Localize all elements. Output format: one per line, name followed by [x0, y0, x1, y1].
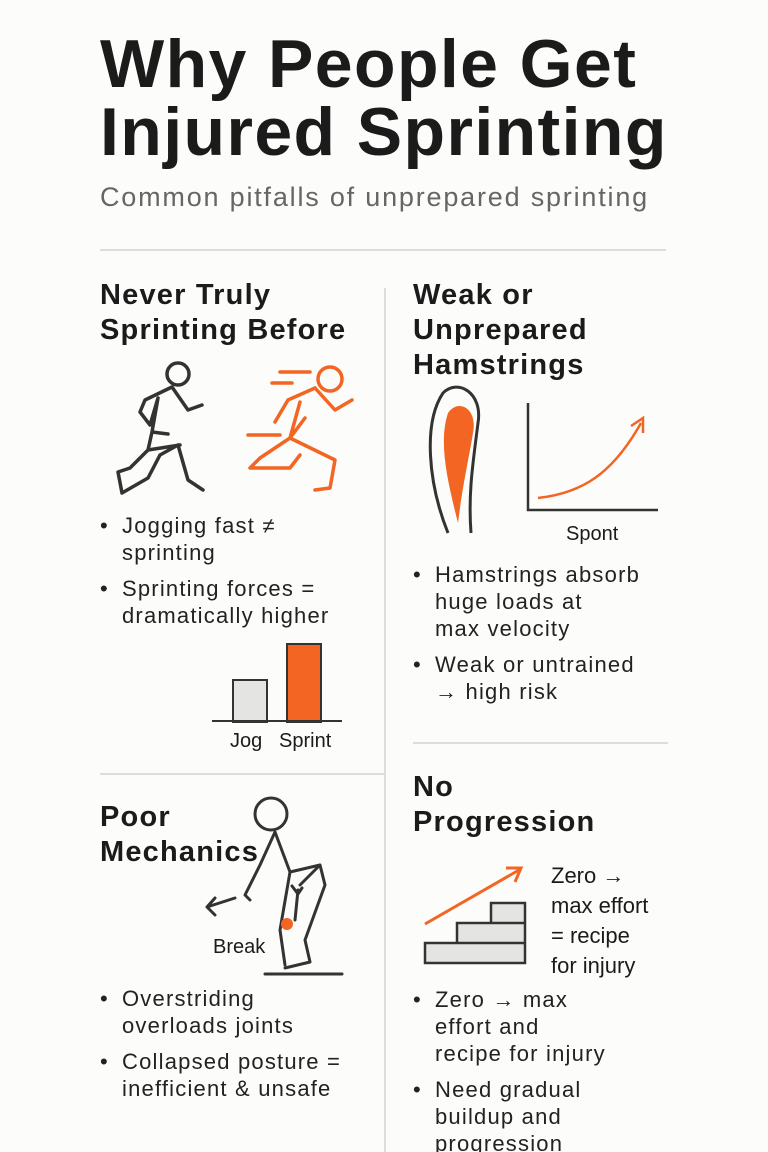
title: Why People Get — [100, 26, 637, 102]
panel: no progression — [413, 771, 648, 1152]
title: Injured Sprinting — [100, 94, 668, 170]
icon: stairs with arrow — [424, 866, 526, 964]
bullets: Jogging fast ≠ — [122, 513, 276, 538]
bar chart: jog vs sprint — [212, 643, 342, 752]
panel: weak hamstrings — [413, 279, 658, 704]
bullets: dramatically higher — [122, 603, 329, 628]
icon: runners — [116, 361, 354, 495]
axis label: Spont — [566, 523, 618, 545]
bullets: Hamstrings absorb — [435, 562, 640, 587]
bullets: huge loads at — [435, 589, 583, 614]
subtitle: Common pitfalls of unprepared sprinting — [100, 182, 649, 212]
heading — [100, 801, 259, 868]
callout text: = recipe — [551, 923, 630, 948]
bullets — [414, 987, 606, 1152]
bullets: buildup and — [435, 1104, 562, 1129]
heading: No — [413, 771, 454, 803]
bullets — [100, 513, 329, 628]
line chart — [526, 403, 658, 512]
bullets: overloads joints — [122, 1013, 294, 1038]
icon: hamstring muscle — [428, 386, 480, 534]
heading: Poor — [100, 801, 171, 833]
bullets: Overstriding — [122, 986, 255, 1011]
title — [100, 26, 668, 170]
heading: Unprepared — [413, 314, 588, 346]
bullets: sprinting — [122, 540, 216, 565]
label: break: Break — [213, 936, 265, 958]
bullets: inefficient & unsafe — [122, 1076, 332, 1101]
callout text: max effort — [551, 893, 648, 918]
heading — [413, 771, 595, 838]
bullets: Need gradual — [435, 1077, 582, 1102]
bullets: effort and — [435, 1014, 540, 1039]
heading: Weak or — [413, 279, 534, 311]
bullets: Collapsed posture = — [122, 1049, 341, 1074]
heading — [100, 279, 346, 346]
bullets — [100, 986, 341, 1101]
heading: Never Truly — [100, 279, 271, 311]
bullets: Sprinting forces = — [122, 576, 315, 601]
callout text — [551, 863, 648, 978]
panel: poor mechanics — [100, 796, 344, 1101]
bar chart: jog vs sprint: Jog — [230, 730, 262, 752]
panel: never truly sprinting — [100, 279, 354, 752]
bullets: Zero → max — [435, 987, 568, 1012]
icon: collapsed runner — [205, 796, 344, 976]
callout text: for injury — [551, 953, 635, 978]
heading: Sprinting Before — [100, 314, 346, 346]
heading: Hamstrings — [413, 349, 585, 381]
bullets: Weak or untrained — [435, 652, 635, 677]
heading — [413, 279, 588, 381]
callout text: Zero → — [551, 863, 624, 888]
bullets: max velocity — [435, 616, 570, 641]
heading: Progression — [413, 806, 595, 838]
bullets — [414, 562, 640, 704]
bullets: → high risk — [435, 679, 558, 704]
heading: Mechanics — [100, 836, 259, 868]
bullets: recipe for injury — [435, 1041, 606, 1066]
bar chart: jog vs sprint: Sprint — [279, 730, 331, 752]
